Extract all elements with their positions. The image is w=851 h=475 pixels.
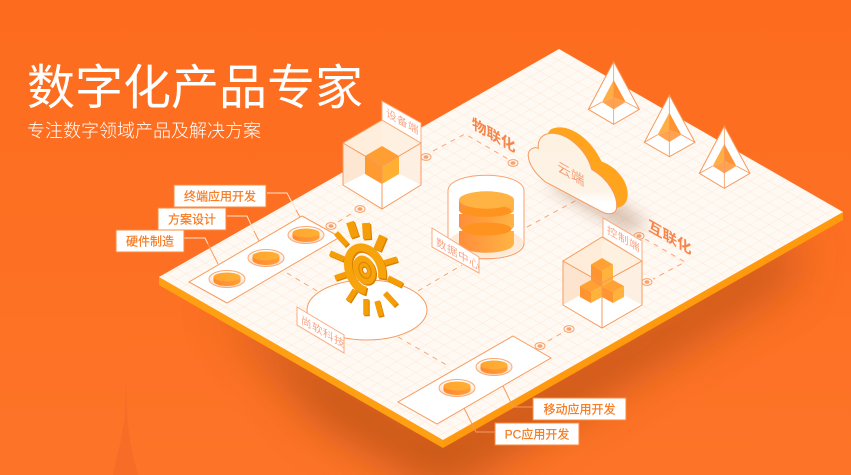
- disc layer top: [459, 200, 514, 219]
- label: solution design: [158, 208, 259, 241]
- device cube: [343, 120, 421, 209]
- sun rays shadow: [331, 223, 403, 317]
- label: PC application development: PC应用开发: [505, 426, 569, 442]
- disc layer middle: [459, 214, 514, 235]
- faint tower silhouette: [113, 378, 138, 475]
- subtitle: 专注数字领域产品及解决方案: [27, 121, 261, 141]
- heading: internet of things: 物联化: [472, 114, 516, 157]
- upper dark band: [462, 205, 512, 217]
- label: hardware manufacturing: 硬件制造: [126, 234, 174, 248]
- label flag: shangruan technology: 尚软科技: [301, 313, 345, 351]
- label flag: control end: [603, 218, 642, 261]
- pyramid 2: [644, 95, 695, 157]
- disc: mobile: [476, 358, 512, 376]
- label flag: data center: 数据中心: [436, 235, 480, 273]
- disc: PC: [439, 380, 475, 396]
- platform drop shadow: [215, 232, 800, 475]
- sun logo: [330, 222, 403, 317]
- dashed connection lines: [287, 134, 685, 367]
- label: mobile application development: [503, 386, 626, 420]
- connection nodes: [326, 154, 652, 349]
- label: hardware manufacturing: [116, 230, 218, 264]
- label: mobile application development: 移动应用开发: [543, 402, 616, 416]
- cloud icon: [528, 127, 628, 214]
- cloud shadow: [545, 180, 650, 232]
- control cube: [563, 237, 642, 328]
- cloud icon: 云端: [557, 159, 584, 190]
- pyramid 3: [699, 126, 750, 188]
- top surface: [459, 191, 514, 209]
- label: terminal application development: [174, 185, 300, 217]
- label flag: device end: 设备端: [386, 106, 419, 138]
- sun rings: [348, 247, 383, 292]
- disc: solution: [248, 250, 284, 266]
- disc layer bottom: [459, 231, 514, 253]
- heading: internet: 互联化: [648, 216, 692, 259]
- disc: hardware: [209, 270, 245, 288]
- isometric platform: [159, 49, 843, 448]
- sun rays: [330, 222, 402, 316]
- label: terminal application development: 终端应用开发: [184, 188, 256, 204]
- label flag: control end: 控制端: [607, 223, 640, 255]
- label flag: device end: [382, 101, 421, 143]
- label: solution design: 方案设计: [168, 212, 216, 226]
- panel: terminal development group: [189, 216, 340, 303]
- sun base ellipse: [307, 280, 427, 340]
- lower dark band: [462, 222, 512, 236]
- title: 数字化产品专家: [27, 62, 363, 115]
- stacked cubes: [580, 258, 624, 303]
- inner cube: [365, 146, 399, 184]
- label: PC application development: [464, 408, 579, 445]
- disc: terminal: [288, 226, 324, 244]
- database cylinder: [448, 175, 524, 259]
- panel: mobile and PC development group: [398, 336, 551, 424]
- pyramid 1: [588, 62, 639, 124]
